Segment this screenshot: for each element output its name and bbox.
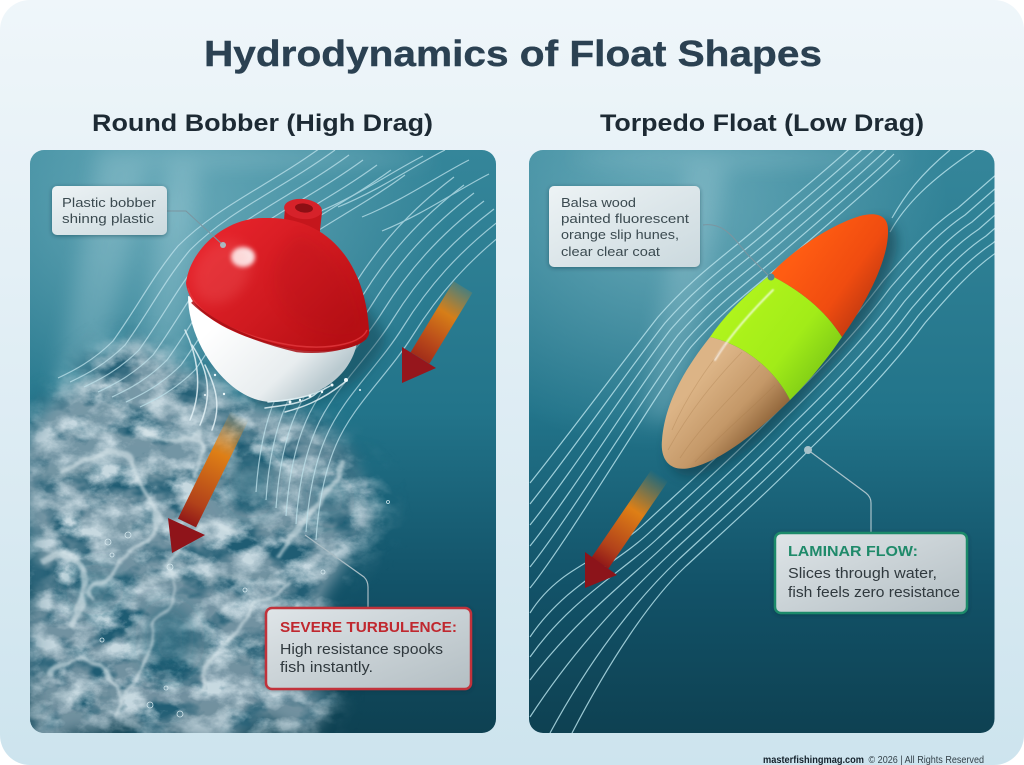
callout: laminar flow: fish feels zero resistance	[788, 584, 960, 601]
callout: laminar flow: LAMINAR FLOW:	[788, 543, 918, 560]
bubbles	[100, 500, 390, 717]
red dome	[186, 218, 369, 351]
stem	[283, 197, 323, 242]
streamlines	[530, 130, 1024, 733]
flow arrow: center	[168, 411, 249, 553]
label: balsa wood: clear clear coat	[561, 244, 660, 259]
leader: laminar flow	[804, 446, 871, 533]
heading: round bobber: Round Bobber (High Drag)	[92, 110, 433, 137]
green band	[710, 275, 842, 400]
callout: severe turbulence: fish instantly.	[280, 659, 373, 676]
callout: severe turbulence: High resistance spooks	[280, 641, 443, 658]
bobber	[181, 197, 386, 430]
spray	[185, 330, 345, 430]
flow arrow	[585, 469, 668, 588]
turbulence cloud	[30, 342, 381, 733]
torpedo float	[662, 214, 897, 476]
heading: torpedo float: Torpedo Float (Low Drag)	[600, 110, 924, 137]
highlight	[715, 290, 773, 360]
streamlines	[58, 146, 514, 540]
callout: laminar flow: Slices through water,	[788, 565, 937, 582]
label: balsa wood	[549, 186, 700, 267]
label: balsa wood: painted fluorescent	[561, 211, 689, 226]
label: balsa wood: orange slip hunes,	[561, 227, 679, 242]
orange tip	[770, 214, 888, 337]
panel: round bobber	[30, 146, 514, 733]
highlight	[231, 247, 255, 267]
leader: balsa wood	[703, 225, 774, 280]
panel: torpedo float	[529, 130, 1024, 733]
callout: severe turbulence: SEVERE TURBULENCE:	[280, 619, 457, 636]
callout: severe turbulence	[266, 608, 471, 689]
label: balsa wood: Balsa wood	[561, 195, 636, 210]
leader: plastic bobber	[167, 211, 226, 248]
label: plastic bobber	[52, 186, 167, 235]
label: plastic bobber: shinng plastic	[62, 211, 155, 226]
label: plastic bobber: Plastic bobber	[62, 195, 157, 210]
wood body	[662, 337, 790, 469]
leader: turbulence	[305, 535, 368, 608]
title: Hydrodynamics of Float Shapes	[204, 33, 822, 74]
rim	[188, 288, 367, 347]
flow arrow: right	[402, 281, 472, 383]
callout: laminar flow	[775, 533, 967, 613]
white lower half	[188, 296, 358, 402]
